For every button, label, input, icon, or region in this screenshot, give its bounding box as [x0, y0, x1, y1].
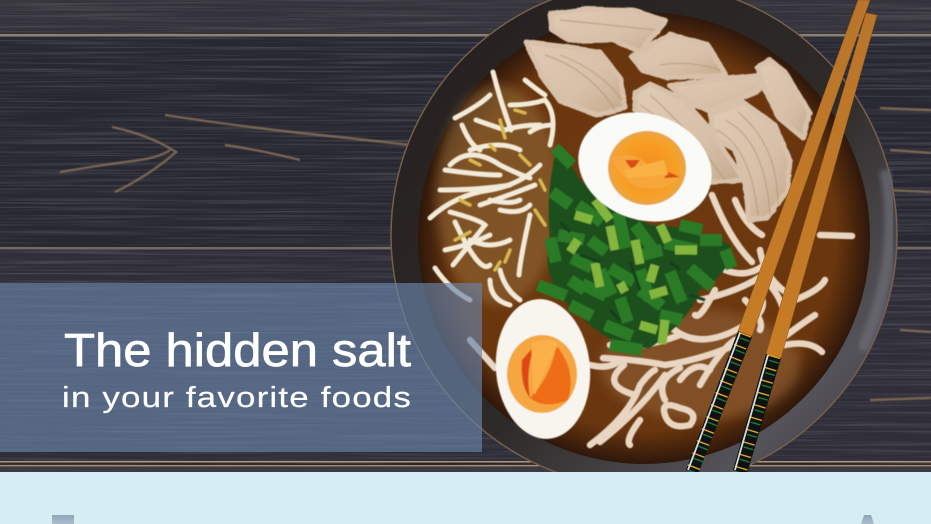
noodles [470, 195, 852, 445]
subtitle: in your favorite foods [62, 382, 412, 414]
icon: cropped right food icon [861, 515, 874, 524]
icon: cropped left food icon [52, 515, 74, 524]
sprout and noodle shadow mass [436, 85, 800, 420]
chopstick right [733, 13, 877, 477]
chicken pieces [526, 9, 810, 220]
bowl rim [391, 0, 897, 488]
title: The hidden salt [64, 324, 411, 376]
egg bottom [495, 298, 591, 440]
chopstick left [686, 0, 870, 477]
soup [418, 12, 870, 464]
chopsticks [686, 0, 877, 477]
green onions [538, 145, 732, 350]
bean sprouts [430, 72, 553, 305]
title panel: translucent blue overlay [0, 283, 482, 452]
egg top [578, 112, 712, 222]
